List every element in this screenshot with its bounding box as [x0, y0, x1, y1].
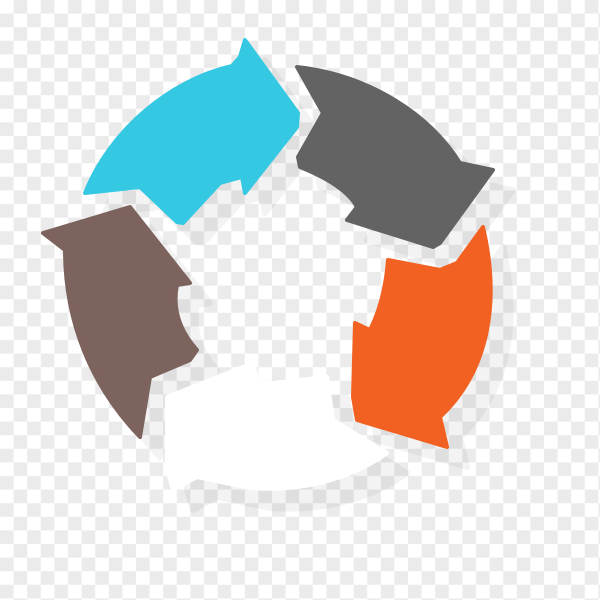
arrow: dark gray [297, 67, 493, 247]
arrow: blue [85, 40, 298, 223]
arrow: orange [353, 227, 491, 447]
arrow: white [167, 363, 387, 490]
arrow: brown [43, 207, 197, 437]
long shadows [63, 60, 513, 510]
